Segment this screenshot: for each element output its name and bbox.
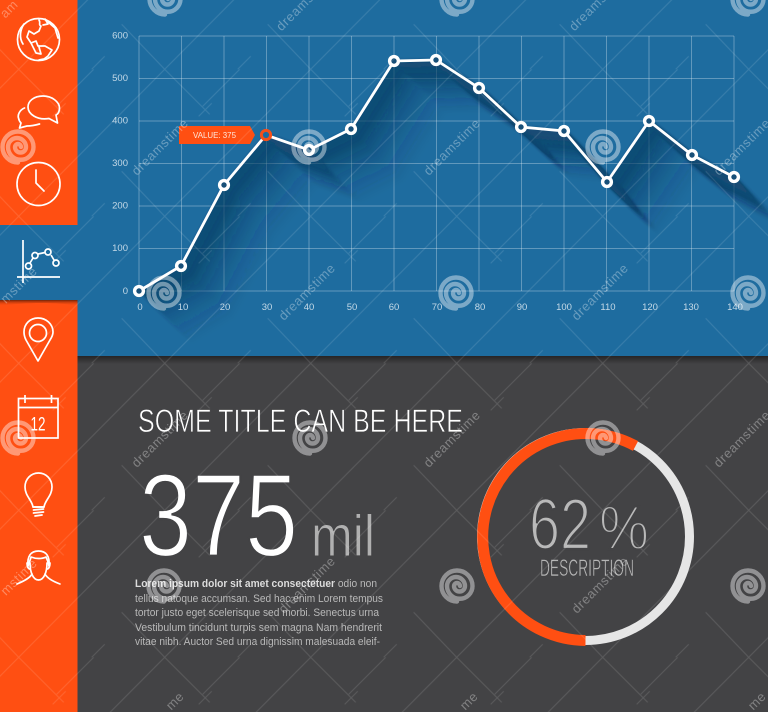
watermark text: dreamstime — [568, 260, 631, 323]
icon: clock — [17, 162, 60, 206]
y axis labels: 600 — [112, 30, 128, 42]
donut description: DESCRIPTION — [540, 555, 634, 582]
y axis labels: 0 — [123, 286, 128, 297]
icon: calendar — [18, 395, 58, 438]
x axis labels: 20 — [220, 302, 230, 313]
big number with unit: mil — [311, 504, 375, 569]
watermark text: dreamstime — [420, 115, 483, 178]
callout: value label: VALUE: 375 — [193, 130, 236, 140]
panel: dark statistics background — [0, 356, 768, 712]
x axis labels: 10 — [178, 302, 188, 313]
x axis labels: 0 — [137, 302, 143, 313]
donut value: 62 — [529, 485, 591, 565]
watermark text: dreamstime — [420, 407, 483, 470]
text block: description: tortor justo eget scelerisque sed morbi. Senectus urna — [135, 607, 380, 619]
y axis labels: 100 — [112, 243, 128, 254]
big number with unit: 375 — [139, 450, 298, 582]
x axis labels: 140 — [727, 302, 743, 313]
icon: chat bubbles — [18, 96, 60, 128]
text block: description — [135, 578, 383, 648]
x axis labels: 50 — [347, 302, 357, 313]
x axis labels: 60 — [389, 302, 399, 313]
panel: chart grid — [139, 36, 734, 291]
watermark text: dreamstime — [275, 260, 338, 323]
x axis labels: 120 — [642, 302, 658, 313]
watermark text: dreamstime — [275, 553, 338, 616]
x axis labels: 130 — [683, 302, 699, 313]
x axis labels: 70 — [432, 302, 442, 313]
y axis labels: 400 — [112, 116, 128, 126]
watermark text: dreamstime — [128, 115, 191, 178]
callout: value label — [179, 126, 255, 144]
watermark text: dreamstime — [568, 553, 631, 616]
line chart long shadow — [140, 61, 768, 343]
icon: light bulb — [25, 473, 52, 516]
y axis labels: 500 — [112, 73, 128, 84]
y axis labels: 300 — [112, 158, 128, 169]
x axis labels — [137, 302, 743, 313]
text block: description: Vestibulum tincidunt turpis sem magna Nam hendrerit — [135, 622, 382, 634]
heading: panel title: SOME TITLE CAN BE HERE — [138, 403, 463, 439]
icon: globe — [18, 18, 60, 60]
donut value: % — [599, 494, 649, 563]
donut value — [529, 485, 649, 565]
x axis labels: 100 — [556, 302, 572, 313]
x axis labels: 90 — [517, 302, 527, 313]
icon: person — [17, 551, 60, 584]
x axis labels: 110 — [600, 302, 616, 313]
y axis labels: 200 — [112, 200, 128, 212]
panel: chart background — [0, 0, 768, 356]
watermark text: dreamstime — [128, 407, 191, 470]
x axis labels: 80 — [475, 302, 485, 313]
icon: map pin — [24, 318, 53, 361]
text block: description: vitae nibh. Auctor Sed urna dignissim malesuada eleif- — [135, 636, 380, 648]
donut chart: 62 percent — [482, 432, 690, 640]
line chart — [135, 56, 738, 295]
text block: description: tellus natoque accumsan. Sed hac enim Lorem tempus — [135, 593, 383, 605]
text block: description: Lorem ipsum dolor sit amet consectetuer odio non — [135, 578, 377, 590]
icon: calendar: 12 — [30, 414, 46, 436]
icon: chart tab — [17, 240, 60, 283]
x axis labels: 30 — [262, 302, 272, 313]
x axis labels: 40 — [304, 302, 314, 313]
y axis labels — [112, 30, 128, 297]
